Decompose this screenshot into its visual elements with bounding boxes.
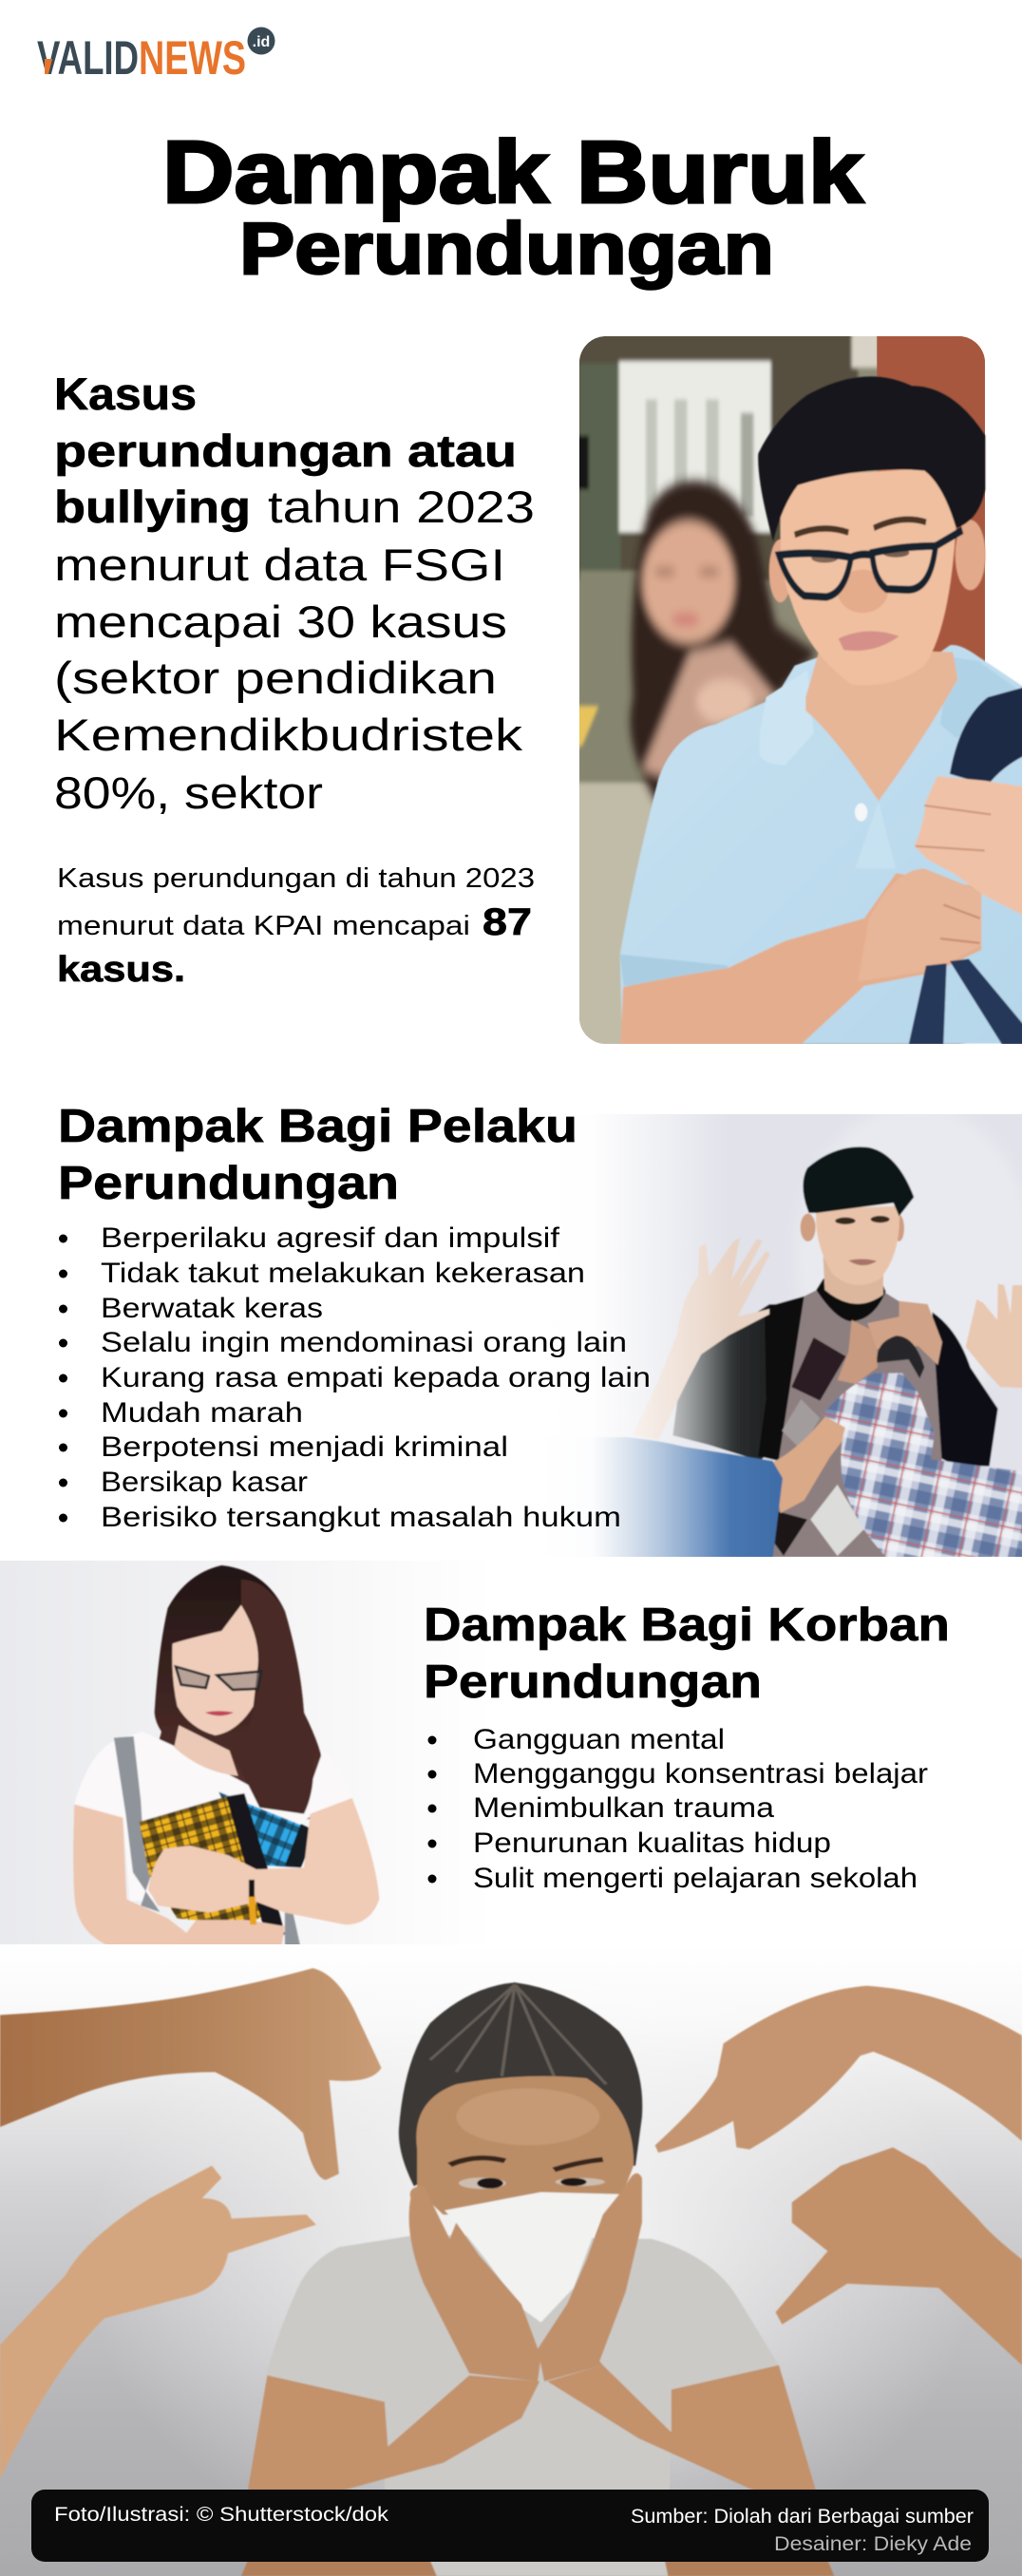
hair	[803, 1146, 914, 1216]
photo credit: Foto/Ilustrasi: © Shutterstock/dok	[54, 2504, 389, 2526]
upper hand	[915, 776, 1022, 919]
intro paragraph	[54, 369, 535, 818]
lips	[839, 631, 899, 651]
right arm	[148, 1798, 379, 1924]
glasses	[779, 530, 962, 597]
list: impacts on perpetrators: Selalu ingin mendominasi orang lain	[101, 1327, 627, 1358]
KPAI paragraph: menurut data KPAI mencapai	[57, 911, 470, 941]
intro paragraph: mencapai 30 kasus	[54, 597, 507, 647]
face	[172, 1605, 258, 1735]
shirt	[264, 2235, 779, 2576]
intro paragraph: (sektor pendidikan	[54, 653, 497, 703]
list: impacts on perpetrators: Berperilaku agresif dan impulsif	[101, 1222, 560, 1254]
right sleeve	[931, 1312, 998, 1467]
pen	[249, 1896, 256, 1924]
ears	[769, 540, 792, 602]
intro paragraph: menurut data FSGI	[54, 540, 505, 590]
list: impacts on perpetrators: Berpotensi menjadi kriminal	[101, 1431, 508, 1463]
left pointing hand	[0, 2166, 316, 2479]
list: impacts on perpetrators: Mudah marah	[101, 1397, 303, 1429]
logo: VALIDNEWS.id: .id	[253, 34, 270, 50]
polo shirt	[620, 645, 1022, 1044]
list: impacts on victims	[427, 1724, 928, 1894]
left sleeve	[672, 1303, 776, 1461]
backpack straps	[950, 686, 1022, 786]
right thumb down	[776, 2148, 1022, 2365]
hair	[145, 1565, 326, 1824]
brows and eyes	[795, 520, 926, 535]
neck	[805, 648, 957, 801]
ears	[801, 1214, 816, 1241]
photo: girl hugging notebooks	[0, 1561, 380, 1944]
heading: Dampak Bagi Korban Perundungan: Dampak Bagi Korban	[424, 1600, 950, 1651]
left raised hand	[633, 1239, 770, 1440]
list: impacts on perpetrators: Bersikap kasar	[101, 1467, 308, 1498]
list: impacts on victims: Gangguan mental	[473, 1724, 725, 1755]
list: impacts on perpetrators	[59, 1222, 651, 1533]
forearm	[620, 873, 981, 1045]
logo: VALIDNEWS.id: NEWS	[139, 31, 246, 85]
white tee	[75, 1733, 325, 1902]
title: Dampak Buruk	[162, 123, 863, 221]
top-right pointing hand	[655, 1986, 1022, 2152]
mask	[445, 2192, 619, 2322]
fade from photo to white	[532, 1114, 731, 1557]
right hand on cheek	[538, 2173, 642, 2381]
right raised hand	[966, 1283, 1022, 1388]
list: impacts on perpetrators: Berisiko tersangkut masalah hukum	[101, 1502, 621, 1533]
glasses	[176, 1667, 261, 1690]
photo: boy being grabbed with raised hands	[598, 1114, 1022, 1557]
heading: Dampak Bagi Korban Perundungan: Perundungan	[424, 1657, 762, 1708]
bare forearm	[773, 1415, 845, 1514]
list: impacts on victims: Penurunan kualitas hidup	[473, 1828, 831, 1859]
plaid sleeve	[823, 1373, 1022, 1561]
face	[816, 1206, 899, 1285]
list: impacts on perpetrators: Berwatak keras	[101, 1293, 323, 1324]
intro paragraph: Kasus	[54, 369, 197, 419]
KPAI paragraph	[57, 863, 535, 990]
footer bar	[31, 2490, 989, 2562]
face	[780, 467, 956, 685]
denim strap	[114, 1736, 160, 1912]
intro paragraph: perundungan atau	[54, 426, 517, 476]
wristwatch	[877, 1335, 924, 1378]
blue notebook	[218, 1791, 304, 1868]
lower hand	[178, 1920, 285, 1945]
face	[416, 2076, 634, 2214]
designer: Desainer: Dieky Ade	[774, 2533, 972, 2555]
title	[162, 123, 863, 290]
KPAI paragraph: kasus.	[57, 950, 185, 990]
logo: VALIDNEWS.id: VALID	[37, 31, 139, 85]
source: Sumber: Diolah dari Berbagai sumber	[631, 2506, 974, 2528]
grabbing hand	[838, 1320, 878, 1384]
hair	[399, 1982, 642, 2186]
list: impacts on victims: Menimbulkan trauma	[473, 1792, 774, 1824]
hair front strand	[235, 1580, 313, 1814]
intro paragraph: tahun 2023	[268, 482, 535, 532]
KPAI paragraph: 87	[483, 901, 532, 943]
logo: VALIDNEWS.id	[37, 27, 275, 85]
argyle vest	[757, 1288, 942, 1558]
left arm	[72, 1804, 187, 1944]
list: impacts on victims: Mengganggu konsentrasi belajar	[473, 1758, 928, 1790]
top-left thumb down	[0, 1968, 381, 2180]
list: impacts on victims: Sulit mengerti pelajaran sekolah	[473, 1863, 918, 1894]
heading: Dampak Bagi Korban Perundungan	[424, 1600, 950, 1708]
neck	[174, 1725, 238, 1776]
heading: Dampak Bagi Pelaku Perundungan	[58, 1101, 577, 1209]
left hand on cheek	[409, 2186, 541, 2381]
intro paragraph: 80%, sektor	[54, 767, 323, 818]
lips	[205, 1711, 234, 1715]
photo: masked woman surrounded by pointing hands	[0, 1938, 1022, 2576]
list: impacts on perpetrators: Tidak takut melakukan kekerasan	[101, 1258, 585, 1289]
neck and collar	[816, 1279, 886, 1321]
intro paragraph: Kemendikbudristek	[54, 710, 523, 760]
hair	[758, 376, 985, 541]
intro paragraph: bullying	[54, 482, 251, 532]
brows and eyes	[449, 2158, 603, 2169]
heading: Dampak Bagi Pelaku Perundungan: Perundungan	[58, 1158, 399, 1209]
KPAI paragraph: Kasus perundungan di tahun 2023	[57, 863, 535, 894]
photo: student with backpack and blurred girl behind	[573, 327, 1022, 1053]
title: Perundungan	[239, 208, 774, 290]
list: impacts on perpetrators: Kurang rasa empati kepada orang lain	[101, 1362, 651, 1393]
yellow notebook	[140, 1796, 263, 1924]
backpack strap	[758, 1297, 804, 1461]
heading: Dampak Bagi Pelaku Perundungan: Dampak Bagi Pelaku	[58, 1101, 577, 1152]
arms	[248, 2376, 539, 2491]
denim sleeve	[601, 1437, 784, 1557]
